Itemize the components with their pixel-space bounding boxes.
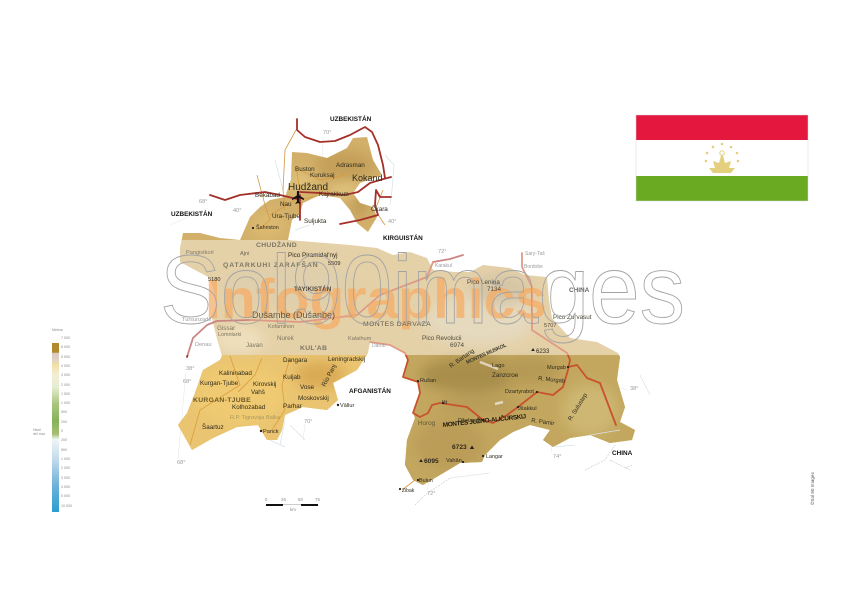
country labels: UZBEKISTÁN	[330, 114, 372, 123]
city and place labels: Suljukta	[304, 218, 327, 225]
city and place labels: Lago	[492, 363, 504, 369]
country labels: CHINA	[612, 450, 633, 457]
city and place labels: Horog	[418, 420, 436, 427]
city and place labels: Šahriston	[256, 224, 279, 231]
city and place labels: 7134	[487, 286, 502, 293]
graticule degree labels: 68°	[177, 460, 185, 466]
city and place labels: Bordobe	[524, 264, 543, 270]
city and place labels: Šaartuz	[202, 422, 224, 431]
legend labels: 5 000	[61, 355, 70, 359]
city and place labels: Kofarnihon	[268, 324, 294, 330]
graticule degree labels: 70°	[323, 130, 331, 136]
city and place labels: Kuruksaj	[310, 172, 334, 179]
country labels	[171, 114, 633, 457]
city and place labels: 5509	[328, 261, 340, 267]
place markers	[252, 227, 569, 490]
city and place labels: Ura-Tjube	[272, 213, 300, 220]
legend labels: 3 000	[61, 373, 70, 377]
city and place labels: Pico Lenina	[467, 279, 500, 286]
city and place labels: Gissar	[217, 325, 235, 332]
graticule degree labels: 72°	[427, 491, 435, 497]
legend labels: 4 000	[61, 364, 70, 368]
graticule lines	[170, 137, 628, 490]
city and place labels: Kolhozabad	[232, 404, 266, 411]
graticule degree labels: 38°	[186, 366, 194, 372]
relief colouring	[178, 137, 635, 485]
country labels: CHINA	[569, 287, 590, 294]
city and place labels: Zanzcroe	[492, 372, 519, 379]
city and place labels: Langar	[486, 454, 503, 460]
city and place labels: Kirovskij	[253, 381, 276, 388]
map of Tajikistan	[160, 119, 650, 505]
legend labels: 200	[61, 420, 67, 424]
watermark: orange wordmark: Infographics	[205, 267, 547, 330]
legend labels: 500	[61, 448, 67, 452]
legend labels: 5 000	[61, 494, 70, 498]
graticule degree labels: 38°	[630, 386, 638, 392]
city and place labels: Tursunzade	[182, 317, 211, 323]
city and place labels: Kuljab	[283, 374, 301, 381]
city and place labels: Vose	[300, 384, 315, 391]
legend labels: 200	[61, 438, 67, 442]
city and place labels: Leningradskij	[328, 356, 365, 363]
graticule degree labels: 72°	[438, 249, 446, 255]
city and place labels: Vahān	[446, 458, 462, 464]
scale bar: km	[290, 507, 296, 512]
legend labels: 10 000	[61, 504, 72, 508]
legend labels: 4 000	[61, 485, 70, 489]
city and place labels: Javan	[246, 342, 263, 349]
region labels: CHUDŽAND	[256, 240, 297, 249]
city and place labels: Nurek	[277, 335, 295, 342]
city and place labels: Nau	[280, 201, 292, 208]
country labels: AFGANISTÁN	[349, 386, 391, 395]
city and place labels: Denau	[195, 342, 211, 348]
legend labels: 2 000	[61, 466, 70, 470]
legend labels: Nivel	[33, 428, 41, 432]
city and place labels: Dželandy	[458, 418, 482, 424]
city and place labels: Pico Revolucii	[422, 335, 462, 342]
city and place labels: Pangistkorl	[186, 250, 214, 256]
city and place labels: Vāllur	[340, 403, 354, 409]
region labels	[193, 240, 527, 429]
legend labels: 6 000	[61, 345, 70, 349]
city and place labels: Dzartyrabot	[505, 389, 534, 395]
graticule degree labels: 70°	[304, 419, 312, 425]
city and place labels: 5180	[208, 277, 220, 283]
city and place labels: 6095	[424, 458, 439, 465]
city and place labels: Darob	[372, 343, 386, 349]
region labels: KUL'AB	[300, 345, 327, 352]
city and place labels: Čkara	[371, 204, 388, 213]
city and place labels: Ajni	[240, 251, 249, 257]
legend labels: 7 000	[61, 336, 70, 340]
city and place labels: R. Murgab	[538, 376, 565, 385]
legend labels: 2 000	[61, 383, 70, 387]
graticule degree labels: 68°	[183, 379, 191, 385]
city and place labels	[182, 162, 592, 494]
icon: airport plane	[292, 191, 304, 204]
city and place labels: Pico Zurvasut	[553, 314, 592, 321]
thin roads	[257, 130, 415, 490]
city and place labels: Išt	[442, 400, 448, 406]
elevation legend	[33, 328, 72, 512]
city and place labels: Kalininabad	[219, 370, 252, 377]
scale bar: 25	[281, 497, 286, 502]
legend labels: 0	[61, 429, 63, 433]
city and place labels: 6723	[452, 444, 467, 451]
image credit: ©Sol 90 Images	[809, 472, 815, 505]
city and place labels: Vahš	[251, 389, 265, 396]
pale highland overlay band	[160, 240, 640, 355]
city and place labels: Pico Piramidal'nyj	[288, 252, 338, 259]
scale bar	[265, 497, 320, 512]
region labels: QATARKUHI ZARAFŠAN	[223, 260, 318, 269]
scale bar: 0	[265, 497, 268, 502]
graticule degree labels: 40°	[233, 208, 241, 214]
scale bar: 50	[298, 497, 303, 502]
legend labels	[33, 328, 72, 508]
country labels: KIRGUISTÁN	[383, 233, 423, 242]
city and place labels: Buston	[295, 166, 315, 173]
city and place labels: Moskovskij	[298, 395, 329, 402]
city and place labels: 6233	[536, 349, 550, 355]
city and place labels: R. Pamir	[531, 418, 555, 427]
region labels: MONTES MUSKOL	[465, 342, 508, 366]
city and place labels: Kokand	[352, 173, 383, 183]
outside rivers and borders	[270, 155, 650, 447]
city and place labels: R.P. Tigrovaja Balka	[230, 415, 281, 421]
city and place labels: Panck	[263, 429, 279, 435]
city and place labels: Dangara	[283, 357, 308, 364]
city and place labels: 5707	[544, 323, 556, 329]
legend labels: 1 000	[61, 457, 70, 461]
city and place labels: Karakul	[435, 263, 452, 269]
city and place labels: Río Panj	[321, 363, 338, 388]
watermark: outlined wordmark: Sol90images	[160, 235, 685, 344]
rivers in the southwest	[190, 166, 345, 445]
city and place labels: Bekabad	[255, 192, 280, 199]
city and place labels: Kajrakkum	[319, 191, 349, 198]
city and place labels: Kurgan-Tjube	[200, 380, 239, 387]
city and place labels: Rušan	[420, 378, 436, 384]
graticule degree labels: 68°	[199, 199, 207, 205]
city and place labels: Sary-Taš	[525, 251, 545, 257]
country labels: TAYIKISTÁN	[294, 284, 332, 293]
main roads and borders	[187, 119, 463, 357]
city and place labels: R. Sulustep	[568, 392, 589, 422]
legend colour ramp	[52, 343, 59, 512]
graticule degree labels	[177, 130, 638, 497]
region labels: KURGAN-TJUBE	[193, 397, 251, 404]
city and place labels: Lomnlarki	[218, 332, 241, 338]
country labels: UZBEKISTÁN	[171, 209, 213, 218]
city and place labels: Adrasman	[336, 162, 365, 169]
city and place labels: Zibak	[402, 488, 415, 494]
graticule degree labels: 40°	[388, 219, 396, 225]
graticule degree labels: 74°	[553, 454, 561, 460]
legend labels: 1 500	[61, 392, 70, 396]
city and place labels: Hudžand	[288, 182, 328, 193]
flag emblem: crown and stars	[705, 143, 739, 173]
flag of Tajikistan	[636, 115, 808, 201]
legend labels: del mar	[33, 432, 46, 436]
city and place labels: Jšakkul	[518, 406, 537, 412]
city and place labels: Dušambe (Dušanbe)	[252, 310, 335, 320]
legend labels: 1 000	[61, 401, 70, 405]
city and place labels: Parhar	[283, 403, 302, 410]
legend labels: Metros	[52, 328, 63, 332]
city and place labels: R. Bartang	[449, 348, 476, 370]
city and place labels: 6974	[450, 342, 465, 349]
city and place labels: Kalaihum	[348, 336, 372, 342]
region labels: MONTES JUŽNO-ALIČURSKIJ	[442, 411, 527, 429]
legend labels: 500	[61, 410, 67, 414]
city and place labels: Murgab	[547, 365, 566, 371]
region labels: MONTES DARVAZA	[363, 321, 431, 328]
scale bar: 75	[315, 497, 320, 502]
city and place labels: Bulun	[419, 478, 433, 484]
legend labels: 3 000	[61, 476, 70, 480]
